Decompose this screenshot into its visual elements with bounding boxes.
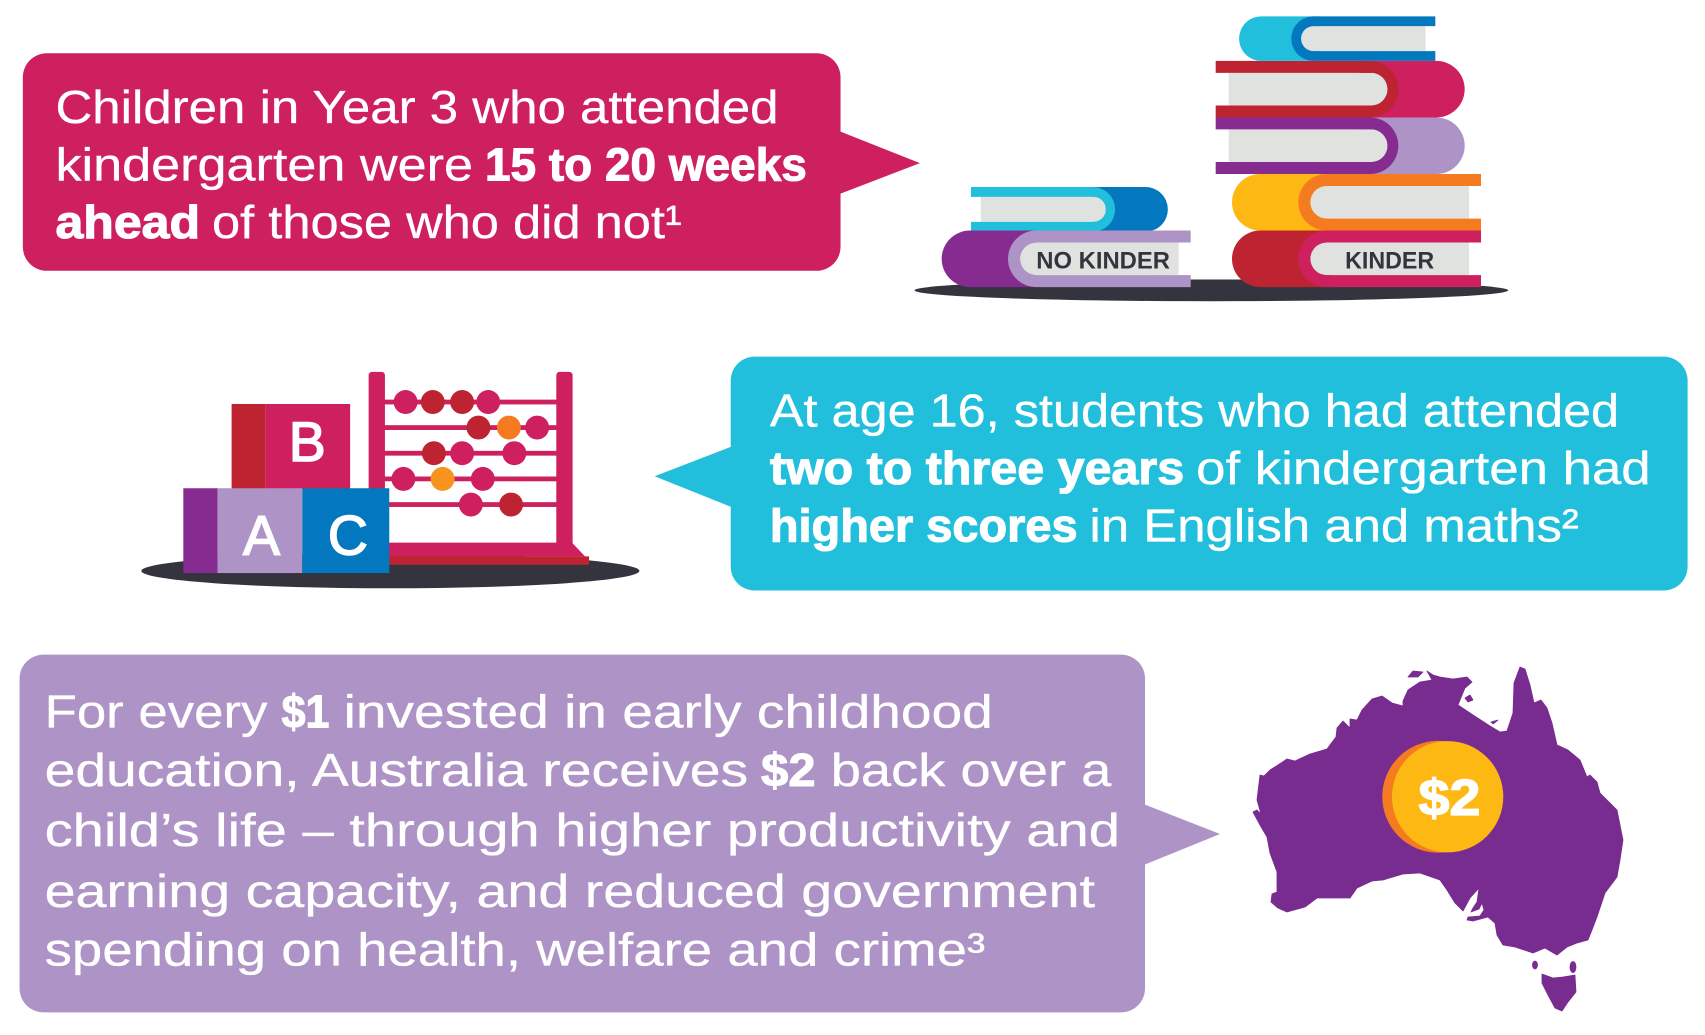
illustration: blocks and abacus bbox=[141, 372, 639, 588]
shadow bbox=[914, 279, 1508, 301]
panel: year 3 callout bbox=[23, 53, 920, 271]
coin: $2 bbox=[1418, 769, 1480, 826]
book: kinder 2 bbox=[1216, 61, 1465, 117]
text block: education, Australia receives bbox=[45, 744, 748, 796]
speech bubble bbox=[655, 357, 1688, 590]
illustration: map of Australia with coin bbox=[1253, 667, 1623, 1011]
text block: $1 bbox=[282, 685, 329, 737]
text block: For every bbox=[45, 685, 268, 737]
shadow bbox=[141, 553, 639, 588]
text block: in English and maths² bbox=[1090, 500, 1579, 552]
text block: $2 bbox=[761, 744, 816, 796]
block A bbox=[183, 488, 302, 573]
book: kinder 3 bbox=[1216, 117, 1465, 174]
text block: of those who did not¹ bbox=[212, 196, 682, 248]
beads bbox=[391, 390, 549, 517]
text block: 15 to 20 weeks bbox=[485, 139, 807, 191]
label: no kinder: NO KINDER bbox=[1036, 248, 1170, 275]
book: no kinder bottom bbox=[942, 231, 1191, 287]
text block: At age 16, students who had attended bbox=[770, 384, 1619, 436]
book: kinder 1 bbox=[1239, 16, 1435, 61]
block A: A bbox=[243, 505, 280, 567]
panel: return on investment callout bbox=[20, 655, 1220, 1012]
book: no kinder top bbox=[971, 187, 1168, 232]
text block: earning capacity, and reduced government bbox=[45, 865, 1095, 917]
text block bbox=[770, 384, 1651, 552]
text block: kindergarten were bbox=[55, 139, 473, 191]
block B: B bbox=[289, 411, 326, 473]
text block bbox=[55, 81, 807, 248]
book: kinder 4 bbox=[1232, 174, 1481, 231]
text block: spending on health, welfare and crime³ bbox=[45, 924, 985, 976]
text block: invested in early childhood bbox=[344, 685, 993, 737]
text block: child’s life – through higher productivity and bbox=[45, 804, 1120, 856]
map bbox=[1253, 667, 1623, 1011]
panel: age 16 callout bbox=[655, 357, 1688, 590]
text block: ahead bbox=[55, 196, 200, 248]
label: kinder: KINDER bbox=[1345, 248, 1434, 275]
block C: C bbox=[328, 505, 368, 567]
speech bubble bbox=[23, 53, 920, 271]
text block: two to three years bbox=[770, 442, 1184, 494]
text block bbox=[45, 685, 1120, 976]
text block: higher scores bbox=[770, 500, 1078, 552]
coin bbox=[1382, 741, 1503, 853]
text block: of kindergarten had bbox=[1196, 442, 1651, 494]
block B bbox=[232, 404, 350, 489]
abacus bbox=[369, 372, 589, 565]
book: kinder 5 bbox=[1232, 231, 1481, 287]
text block: Children in Year 3 who attended bbox=[55, 81, 779, 133]
text block: back over a bbox=[831, 744, 1111, 796]
block C bbox=[302, 488, 389, 573]
speech bubble bbox=[20, 655, 1220, 1012]
illustration: stacks of books bbox=[914, 16, 1508, 301]
